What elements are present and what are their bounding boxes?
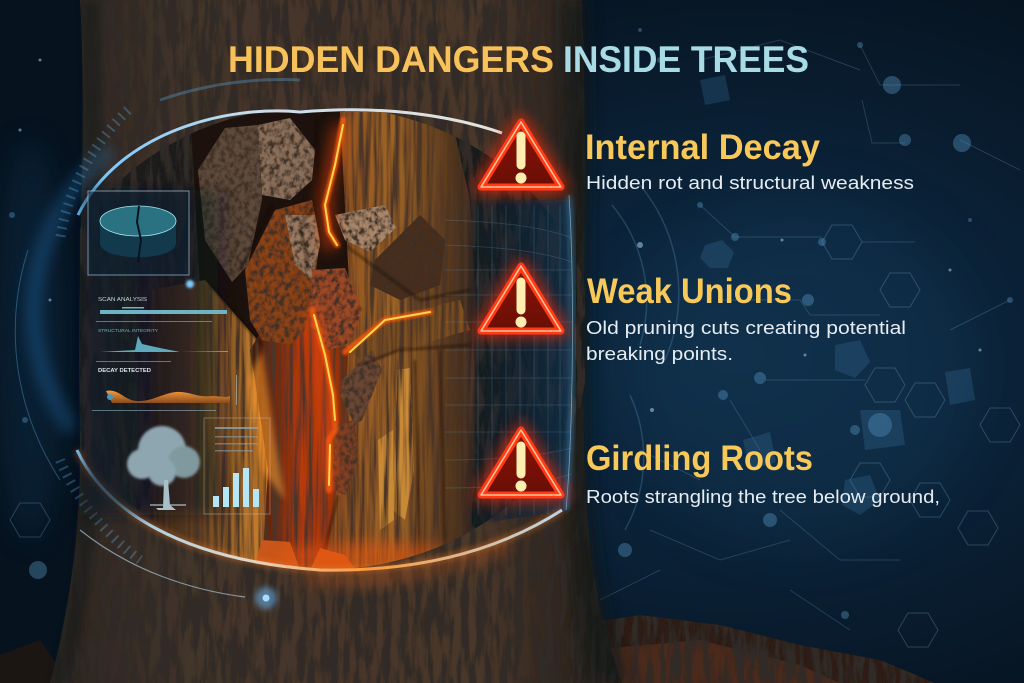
HUD scan panels bbox=[84, 190, 270, 515]
panel: decay detected: DECAY DETECTED bbox=[98, 368, 151, 374]
panel: decay detected bbox=[92, 368, 237, 411]
lava crack lines bbox=[312, 120, 430, 490]
warning item: weak unions: breaking points. bbox=[586, 344, 733, 364]
warning item: internal decay: Hidden rot and structural weakness bbox=[586, 173, 914, 193]
bar chart bbox=[204, 418, 270, 514]
dim scan-side bark bbox=[80, 131, 198, 511]
pale bark knot bbox=[335, 205, 396, 252]
holographic grid over trunk bbox=[445, 195, 572, 525]
warning item: internal decay: Internal Decay bbox=[585, 128, 821, 167]
dark side behind grid bbox=[446, 132, 585, 543]
warning item: weak unions: Old pruning cuts creating potential bbox=[586, 318, 906, 338]
dark shadow behind upper bark bbox=[190, 110, 350, 350]
icon: warning triangle bbox=[481, 430, 561, 495]
tree trunk bbox=[50, 0, 630, 683]
bottom embers bbox=[256, 540, 354, 569]
glow under crack bbox=[312, 125, 340, 490]
bark slab lower center bbox=[340, 350, 382, 425]
bright split wood strips bbox=[378, 368, 414, 530]
ground: fallen logs and roots bbox=[0, 615, 935, 683]
panel: tree cross section bbox=[88, 191, 194, 288]
right wood bbox=[325, 112, 478, 570]
panel: scan analysis: SCAN ANALYSIS bbox=[98, 297, 147, 303]
title: INSIDE TREES bbox=[563, 39, 809, 80]
panel: scan analysis bbox=[96, 297, 227, 322]
glowing crack bed bbox=[250, 305, 348, 568]
warning item: internal decay bbox=[481, 122, 914, 193]
warning item: weak unions bbox=[481, 266, 906, 364]
warning item: girdling roots: Girdling Roots bbox=[586, 439, 813, 478]
upper-left grey bark chunks bbox=[198, 125, 262, 282]
title bbox=[228, 39, 809, 80]
icon: warning triangle bbox=[481, 266, 561, 331]
warning item: girdling roots: Roots strangling the tree below ground, bbox=[586, 487, 940, 507]
dark HUD backing bbox=[84, 190, 242, 515]
warning item: girdling roots bbox=[481, 430, 940, 507]
panel: structural integrity: STRUCTURAL INTEGRITY bbox=[98, 328, 159, 334]
icon: warning triangle bbox=[481, 122, 561, 187]
center reddish knot bbox=[310, 268, 362, 350]
title: HIDDEN DANGERS bbox=[228, 39, 554, 80]
cutaway: exposed decayed wood bbox=[80, 105, 585, 575]
dark knot bark bbox=[370, 215, 445, 300]
dark fissures bbox=[209, 206, 470, 554]
panel: structural integrity bbox=[96, 328, 228, 362]
left lit wood bbox=[150, 280, 285, 570]
horizontal branch bbox=[345, 300, 470, 365]
warning item: weak unions: Weak Unions bbox=[587, 272, 792, 311]
red bark below chunks bbox=[245, 200, 320, 345]
scanner ring bbox=[15, 80, 562, 609]
icon: holographic tree bbox=[127, 426, 200, 510]
